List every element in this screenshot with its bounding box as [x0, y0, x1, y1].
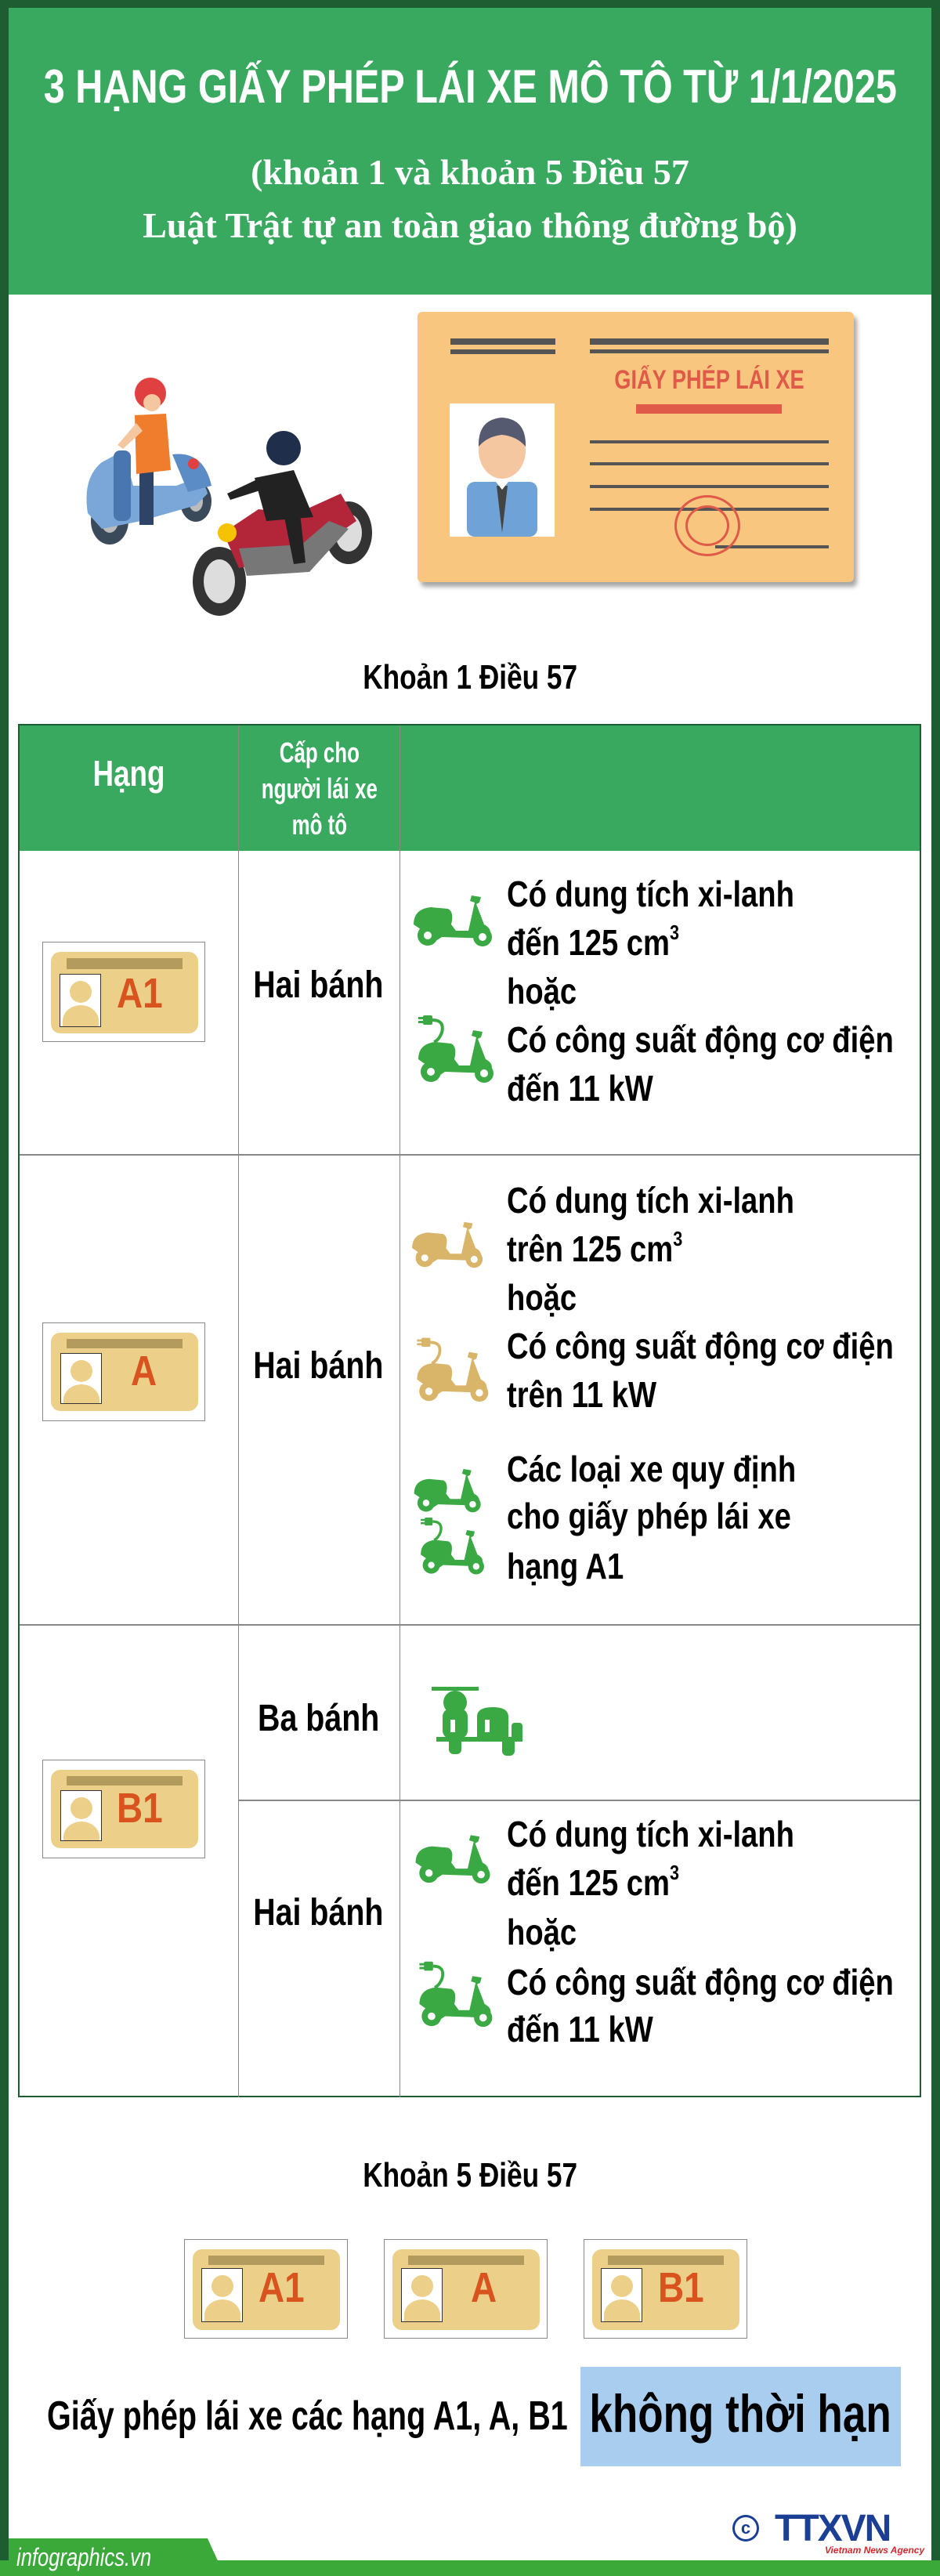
row A: description: cho giấy phép lái xe: [507, 1496, 791, 1536]
row A: description: Có dung tích xi-lanh: [507, 1180, 794, 1221]
subtitle: [143, 152, 797, 245]
card A: [384, 2239, 548, 2339]
row B1: description: đến 125 cm3: [507, 1861, 679, 1903]
logo: TTXVN: [732, 2508, 925, 2556]
row A1: card: A1: [117, 970, 163, 1017]
text: infographics.vn: [16, 2543, 151, 2571]
row B1: two wheels label: Hai bánh: [253, 1892, 384, 1934]
subtitle: (khoản 1 và khoản 5 Điều 57: [251, 152, 689, 192]
row B1: card: B1: [117, 1785, 163, 1832]
row A: card: [42, 1322, 205, 1421]
row A: description: hạng A1: [507, 1546, 624, 1586]
footer: [0, 2560, 940, 2576]
row A: description: [507, 1180, 894, 1586]
row A1: description: đến 125 cm3: [507, 921, 679, 963]
row A: description: trên 125 cm3: [507, 1227, 682, 1269]
highlight: không thời hạn: [580, 2367, 901, 2466]
row A: icons: [412, 1222, 489, 1575]
row B1: three wheels label: Ba bánh: [258, 1698, 379, 1739]
row A: description: trên 11 kW: [507, 1374, 656, 1415]
row A: description: hoặc: [507, 1277, 577, 1318]
row A: vehicle type: Hai bánh: [253, 1345, 384, 1387]
row A: description: Các loại xe quy định: [507, 1449, 796, 1489]
logo: TTXVN: TTXVN: [775, 2508, 890, 2549]
card A1: A1: [258, 2264, 305, 2311]
row A1: vehicle type: Hai bánh: [253, 964, 384, 1006]
row A: card: A: [131, 1348, 157, 1395]
row A1: icons: [414, 895, 494, 1083]
row A1: description: Có dung tích xi-lanh: [507, 874, 794, 914]
row B1: description: hoặc: [507, 1912, 577, 1952]
icon: tricycle: [432, 1687, 522, 1756]
row B1: description: Có dung tích xi-lanh: [507, 1814, 794, 1854]
table: [18, 724, 921, 2097]
illustration: motorbikes: [86, 378, 372, 616]
conclusion text: Giấy phép lái xe các hạng A1, A, B1: [47, 2393, 568, 2439]
row B1: description: Có công suất động cơ điện: [507, 1962, 894, 2003]
highlight: không thời hạn: không thời hạn: [590, 2384, 891, 2444]
logo: TTXVN: Vietnam News Agency: [825, 2545, 924, 2556]
photo: [450, 403, 555, 537]
row A: description: Có công suất động cơ điện: [507, 1326, 894, 1366]
card A: A: [471, 2264, 497, 2311]
row A1: description: Có công suất động cơ điện: [507, 1019, 894, 1060]
cards row: [184, 2239, 747, 2339]
card B1: [584, 2239, 747, 2339]
row A1: card: [42, 942, 205, 1042]
row A1: description: đến 11 kW: [507, 1068, 653, 1109]
illustration: license card: [418, 312, 854, 582]
row B1: icons: [415, 1835, 492, 2028]
logo: TTXVN: c: [741, 2518, 750, 2538]
row B1: description: đến 11 kW: [507, 2009, 653, 2050]
table header: [20, 725, 920, 851]
table header: Cấp cho: [279, 736, 360, 769]
blue scooter: [86, 378, 212, 545]
heading: Khoản 1: Khoản 1 Điều 57: [363, 658, 577, 696]
table header: mô tô: [291, 809, 347, 841]
title: 3 HẠNG GIẤY PHÉP LÁI XE MÔ TÔ TỪ 1/1/2025: [43, 60, 897, 113]
row B1: card: [42, 1760, 205, 1858]
card A1: [184, 2239, 348, 2339]
header panel: [9, 8, 931, 295]
table header: người lái xe: [261, 772, 378, 805]
row A1: description: [507, 874, 894, 1109]
card label: GIẤY PHÉP LÁI XE: [614, 365, 804, 395]
heading: Khoản 5: Khoản 5 Điều 57: [363, 2156, 577, 2194]
stamp: [674, 495, 740, 556]
row B1: description: [507, 1814, 894, 2050]
card B1: B1: [658, 2264, 704, 2311]
row A1: description: hoặc: [507, 971, 577, 1011]
table header: Hạng: [92, 753, 164, 794]
subtitle: Luật Trật tự an toàn giao thông đường bộ): [143, 205, 797, 245]
red motorbike: [193, 431, 372, 616]
